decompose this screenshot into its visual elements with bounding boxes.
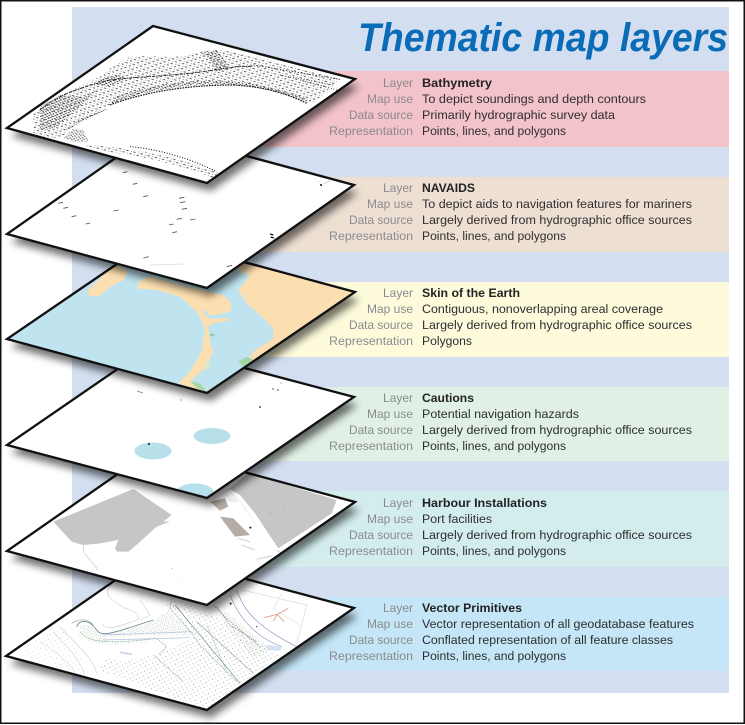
row: Vector Primitives: Vector representation of all geodatabase features [422,617,694,631]
row: Bathymetry: Bathymetry [422,76,492,90]
row: NAVAIDS [250,177,729,252]
row: Vector Primitives: Vector Primitives [422,601,522,615]
row: Cautions: Cautions [422,391,474,405]
row: Bathymetry: To depict soundings and depth contours [422,92,646,106]
row: Skin of the Earth: Largely derived from hydrographic office sources [422,318,692,332]
row: Skin of the Earth: Layer [383,286,413,300]
row: Bathymetry: Representation [329,124,413,138]
map sheet: Harbour Installations [4,472,361,618]
row: Skin of the Earth: Skin of the Earth [422,286,520,300]
row: NAVAIDS: Layer [383,181,413,195]
port facilities [210,473,337,559]
map sheet: Skin of the Earth [4,262,361,406]
row: Harbour Installations: Points, lines, and polygons [422,544,566,558]
row: Harbour Installations: Largely derived from hydrographic office sources [422,528,692,542]
row: Harbour Installations: Map use [367,512,413,526]
row: Harbour Installations: Data source [349,528,413,542]
row: Skin of the Earth [250,282,729,357]
row: Harbour Installations [250,491,729,567]
map sheet: Cautions [4,368,360,510]
row: NAVAIDS: Data source [349,213,413,227]
row: Bathymetry [250,71,729,147]
row: Vector Primitives: Layer [383,601,413,615]
row: Harbour Installations: Port facilities [422,512,492,526]
row: Cautions: Largely derived from hydrographic office sources [422,423,692,437]
row: Bathymetry: Map use [367,92,413,106]
row: Bathymetry: Primarily hydrographic survey data [422,108,615,122]
row: Cautions: Representation [329,439,413,453]
row: Skin of the Earth: Map use [367,302,413,316]
row: NAVAIDS: Representation [329,229,413,243]
row: Cautions [250,387,729,461]
row: Harbour Installations: Layer [383,496,413,510]
map sheet: NAVAIDS [4,155,360,300]
row: Skin of the Earth: Contiguous, nonoverlapping areal coverage [422,302,663,316]
row: Skin of the Earth: Representation [329,334,413,348]
row: Cautions: Points, lines, and polygons [422,439,566,453]
row: Vector Primitives [250,597,729,671]
row: Cautions: Potential navigation hazards [422,407,579,421]
row: Cautions: Data source [349,423,413,437]
row: NAVAIDS: NAVAIDS [422,181,475,195]
row: Bathymetry: Data source [349,108,413,122]
row: NAVAIDS: Map use [367,197,413,211]
row: Vector Primitives: Data source [349,633,413,647]
row: NAVAIDS: To depict aids to navigation features for mariners [422,197,692,211]
row: NAVAIDS: Points, lines, and polygons [422,229,566,243]
title: Thematic map layers [358,16,728,60]
harbour land polygon [53,489,180,581]
row: Bathymetry: Points, lines, and polygons [422,124,566,138]
row: NAVAIDS: Largely derived from hydrographic office sources [422,213,692,227]
map sheet: Vector Primitives [3,578,360,722]
row: Vector Primitives: Map use [367,617,413,631]
map sheet: Bathymetry [7,26,359,191]
row: Vector Primitives: Points, lines, and polygons [422,649,566,663]
row: Vector Primitives: Conflated representation of all feature classes [422,633,673,647]
row: Harbour Installations: Harbour Installations [422,496,547,510]
row: Cautions: Layer [383,391,413,405]
row: Cautions: Map use [367,407,413,421]
row: Skin of the Earth: Data source [349,318,413,332]
row: Bathymetry: Layer [383,76,413,90]
row: Skin of the Earth: Polygons [422,334,472,348]
row: Harbour Installations: Representation [329,544,413,558]
row: Vector Primitives: Representation [329,649,413,663]
